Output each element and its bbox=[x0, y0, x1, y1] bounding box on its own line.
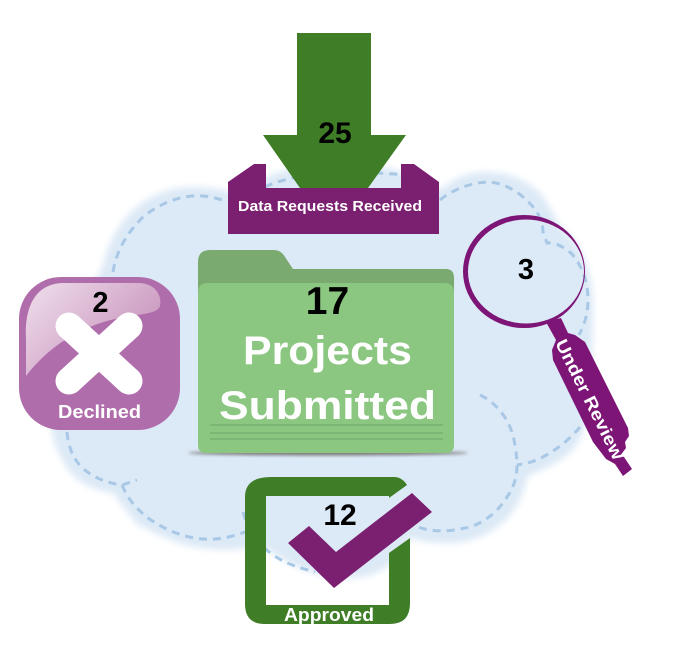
approved label: Approved bbox=[284, 605, 374, 625]
arrow: incoming requests bbox=[263, 33, 406, 188]
folder label: Projects bbox=[243, 329, 412, 373]
icon: approved checkbox bbox=[245, 477, 432, 625]
tray label: Data Requests Received bbox=[238, 199, 422, 215]
count: approved: 12 bbox=[323, 499, 357, 532]
count: projects submitted: 17 bbox=[306, 280, 349, 323]
icon: folder projects submitted: Submitted bbox=[219, 384, 436, 428]
declined label: Declined bbox=[58, 402, 141, 422]
count: under review: 3 bbox=[518, 254, 534, 286]
icon: magnifying glass under review bbox=[463, 215, 632, 476]
under review label: Under Review bbox=[551, 336, 628, 463]
count: declined: 2 bbox=[92, 287, 109, 319]
icon: declined button bbox=[19, 277, 180, 430]
icon: data requests tray bbox=[228, 164, 439, 234]
x mark bbox=[69, 326, 129, 381]
check mark bbox=[288, 493, 432, 588]
cloud background bbox=[50, 163, 593, 578]
icon: folder projects submitted bbox=[188, 250, 468, 456]
count: data requests: 25 bbox=[318, 117, 352, 150]
folder lines bbox=[210, 425, 443, 439]
